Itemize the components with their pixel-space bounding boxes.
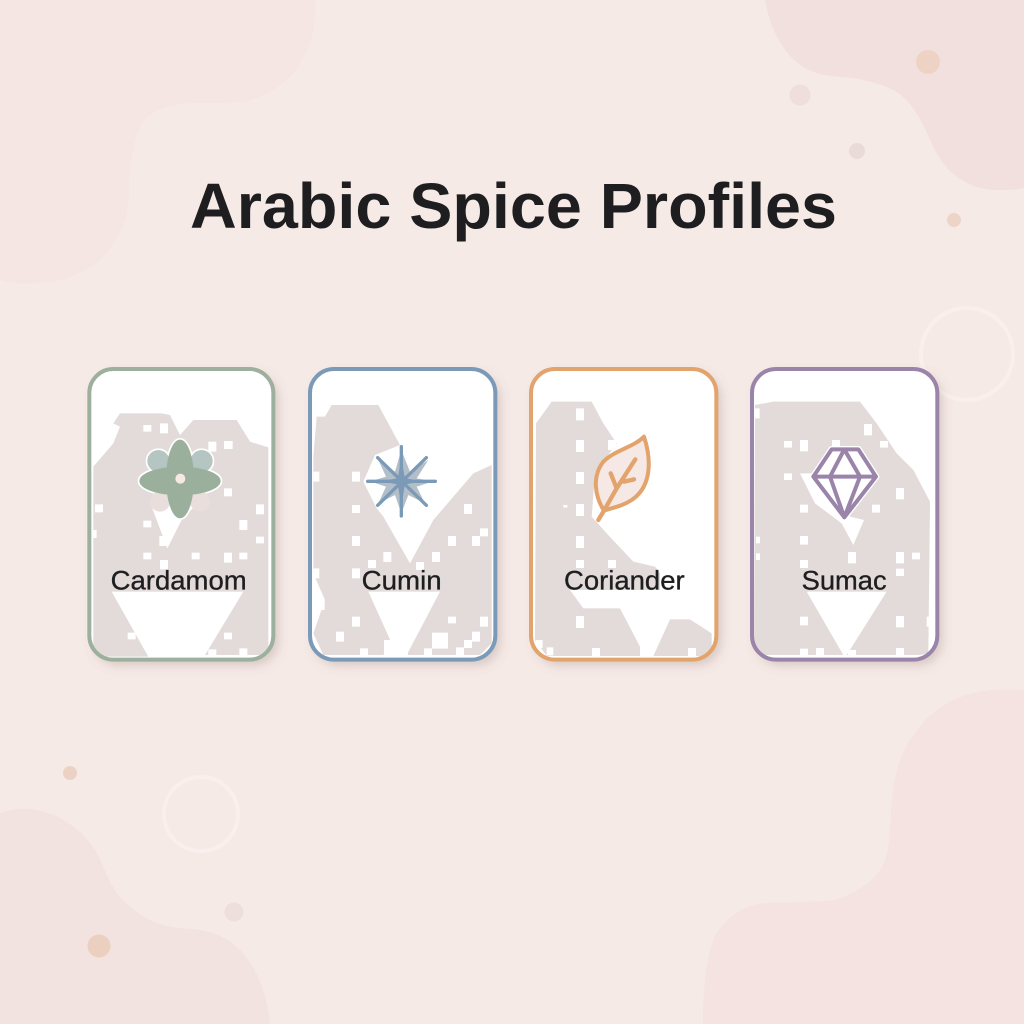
icon: sumac gem <box>813 449 876 517</box>
icon: cardamom flower <box>139 440 221 518</box>
label: Cumin: Cumin <box>362 565 442 595</box>
card: Sumac <box>752 369 937 660</box>
label: Coriander: Coriander <box>564 565 685 595</box>
icon: cumin star <box>368 447 435 516</box>
label: Sumac: Sumac <box>802 565 887 595</box>
card: Cumin <box>310 369 495 660</box>
label: Cardamom: Cardamom <box>111 565 247 595</box>
title: Arabic Spice Profiles <box>190 170 837 242</box>
card: Cardamom <box>89 369 273 660</box>
card: Coriander <box>531 369 716 660</box>
icon: coriander leaf <box>596 437 649 520</box>
